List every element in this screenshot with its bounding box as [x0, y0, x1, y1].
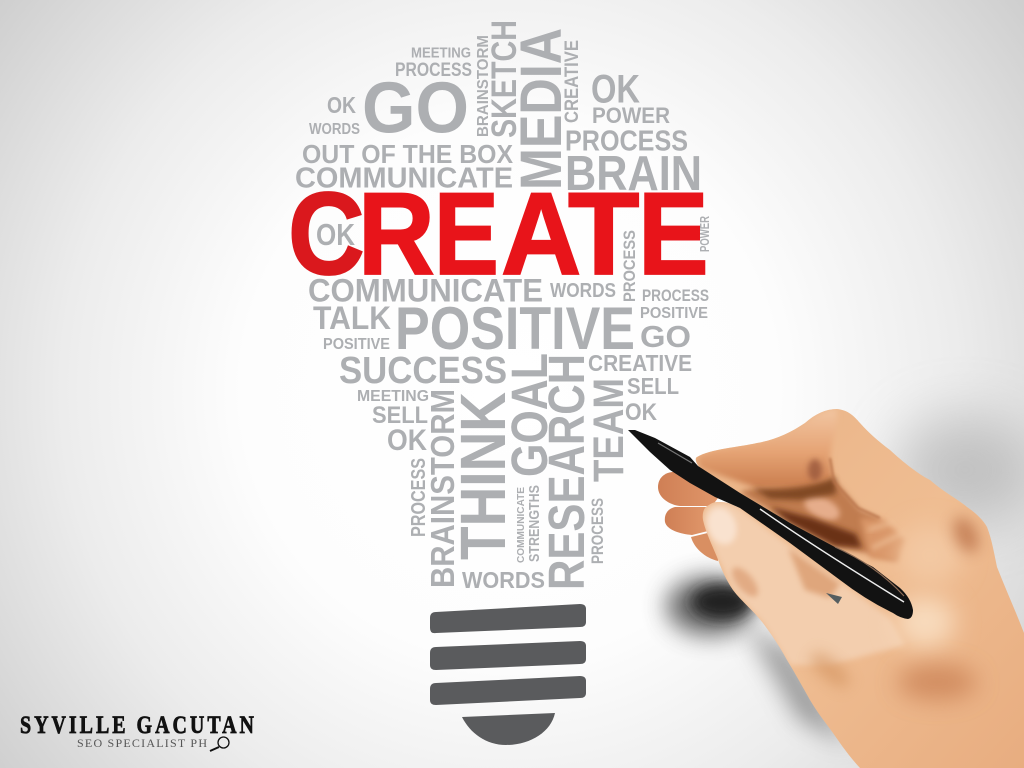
heading: CREATE: E [434, 168, 499, 299]
word: OK: OK [591, 68, 640, 112]
lightbulb word cloud [295, 20, 712, 593]
word: BRAINSTORM vertical: BRAINSTORM [424, 389, 461, 588]
word: SELL: SELL [372, 402, 428, 429]
heading: CREATE [288, 168, 709, 300]
word: SELL: SELL [627, 373, 679, 399]
word: RESEARCH vertical: RESEARCH [538, 354, 595, 590]
word: BRAINSTORM vertical: BRAINSTORM [475, 35, 492, 137]
shading: gap [826, 593, 842, 604]
word: BRAIN: BRAIN [565, 147, 702, 201]
word: THINK vertical: THINK [447, 392, 519, 560]
word: POSITIVE: POSITIVE [640, 305, 708, 322]
shading: thumb joint [730, 566, 760, 598]
base thread 1 [430, 604, 586, 633]
base thread 3 [430, 676, 586, 705]
shading: knuckle folds [860, 518, 905, 562]
hand body [696, 409, 1024, 768]
word: WORDS: WORDS [309, 121, 360, 138]
word: CREATIVE vertical: CREATIVE [562, 40, 583, 123]
finger: middle fingertip [665, 507, 712, 535]
word: TEAM vertical: TEAM [585, 378, 633, 482]
finger: ring fingertip [658, 472, 724, 506]
word: GOAL vertical: GOAL [501, 353, 558, 477]
shading: fold highlight 1 [868, 522, 893, 530]
word: PROCESS: PROCESS [565, 126, 688, 158]
word: GO: GO [362, 68, 469, 148]
pen barrel [628, 430, 913, 619]
shading: wrist patch [897, 664, 977, 700]
shadow: outer [666, 576, 754, 636]
heading: CREATE: C [288, 168, 365, 299]
shading: finger crease [808, 459, 822, 481]
word: MEDIA vertical: MEDIA [509, 28, 574, 190]
index finger [697, 409, 837, 488]
word: CREATIVE: CREATIVE [588, 350, 692, 376]
word: PROCESS vertical: PROCESS [408, 458, 430, 537]
pen highlight upper [658, 443, 692, 463]
heading: CREATE: T [568, 168, 639, 299]
word: POSITIVE: POSITIVE [323, 336, 390, 353]
logo tagline: SEO SPECIALIST PH [77, 736, 207, 750]
heading: CREATE: E [638, 168, 709, 299]
word: PROCESS: PROCESS [642, 286, 709, 305]
word: PROCESS vertical: PROCESS [620, 230, 639, 302]
logo name: SYVILLE GACUTAN [20, 711, 255, 739]
shadow: right of hand [895, 415, 1024, 525]
shading: thumb base patch [806, 648, 852, 690]
pen highlight lower [760, 509, 904, 602]
logo: Syville Gacutan [20, 711, 255, 751]
word: GO: GO [640, 319, 691, 354]
lightbulb screw base [430, 604, 586, 745]
heading: CREATE: R [358, 168, 435, 299]
shading: index underside [752, 477, 836, 500]
shading: palm light [895, 596, 955, 648]
hand holding pen [628, 409, 1024, 768]
word: WORDS: WORDS [462, 567, 545, 593]
heading: CREATE: A [501, 169, 581, 300]
shading: thumbnail [705, 506, 738, 546]
shading: dark crease above pen [770, 507, 862, 548]
shadow: core [692, 585, 752, 619]
word: POWER: POWER [592, 103, 670, 128]
word: MEETING: MEETING [411, 46, 471, 62]
shading: behind fingers [740, 478, 880, 556]
icon: magnifying glass [210, 737, 229, 751]
word: OK inside C: OK [316, 217, 356, 252]
word: SUCCESS: SUCCESS [339, 350, 507, 392]
shading: below pen [788, 548, 840, 598]
word: OK: OK [387, 424, 427, 457]
word: PROCESS vertical: PROCESS [588, 498, 607, 564]
word: POWER vertical: POWER [697, 216, 712, 252]
finger: little fingertip [691, 530, 720, 561]
shading: thumb [703, 502, 905, 665]
shading: knuckle [948, 513, 984, 557]
shading: back of hand light [898, 525, 962, 585]
hand shading [697, 409, 984, 700]
shading: crease line [830, 458, 880, 518]
word: OK: OK [327, 92, 356, 118]
pen [628, 430, 913, 619]
base thread 2 [430, 641, 586, 670]
word: COMMUNICATE: COMMUNICATE [308, 272, 543, 308]
word: WORDS: WORDS [550, 280, 616, 302]
word: COMMUNICATE: COMMUNICATE [295, 162, 513, 194]
shading: inner finger patch [802, 496, 842, 522]
word: OK: OK [625, 399, 658, 426]
word: COMMUNICATE vertical: COMMUNICATE [516, 487, 527, 563]
word: PROCESS: PROCESS [395, 60, 472, 81]
word: POSITIVE large: POSITIVE [395, 295, 635, 362]
hand cast shadow [666, 415, 1024, 745]
word: MEETING: MEETING [357, 388, 429, 405]
shadow: lower swath [745, 625, 850, 745]
word: STRENGTHS vertical: STRENGTHS [527, 485, 543, 562]
shading: fold highlight 2 [872, 532, 905, 548]
word: OUT OF THE BOX: OUT OF THE BOX [302, 139, 514, 169]
pen clip edge [835, 547, 904, 596]
base cap [462, 713, 555, 745]
word: TALK: TALK [313, 300, 391, 336]
